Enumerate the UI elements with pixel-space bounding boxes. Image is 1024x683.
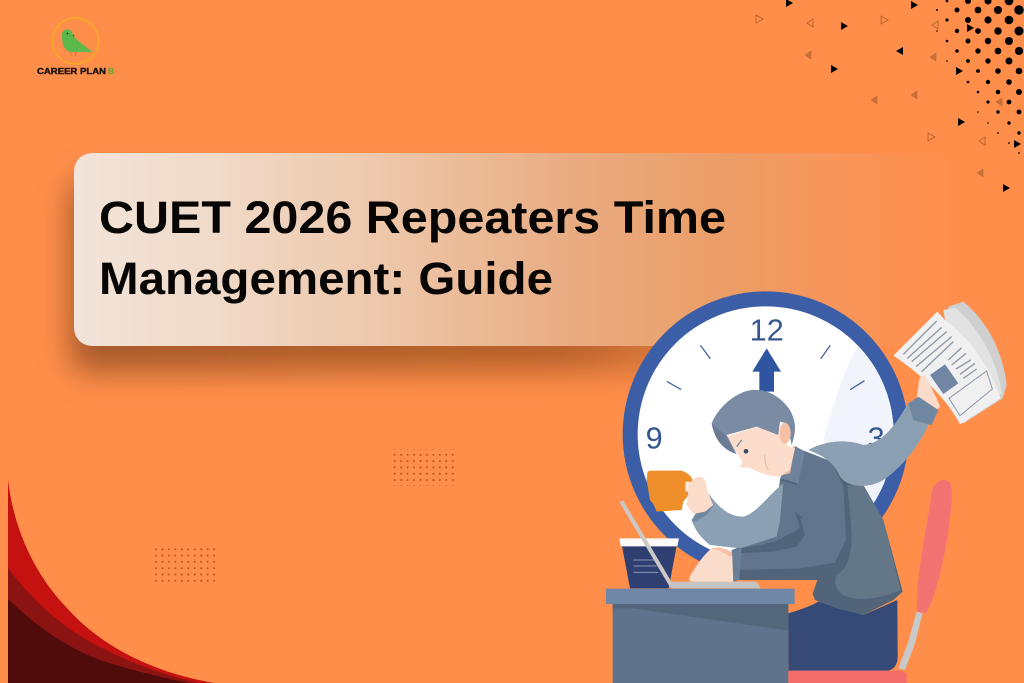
hand on laptop bbox=[689, 548, 742, 582]
corner curves bottom left bbox=[8, 480, 214, 683]
torso bbox=[732, 446, 903, 615]
logo: Career Plan B: CAREER PLAN bbox=[37, 66, 106, 76]
logo: Career Plan B: B bbox=[108, 66, 114, 76]
title bbox=[99, 192, 726, 304]
title panel bbox=[74, 153, 960, 346]
legs bbox=[788, 600, 898, 671]
logo: Career Plan B bbox=[37, 18, 114, 76]
chair bbox=[788, 480, 952, 683]
head bbox=[712, 390, 795, 477]
title: Management: Guide bbox=[99, 253, 553, 304]
decorative triangles top right bbox=[756, 0, 1021, 192]
shadow of the title panel bbox=[70, 180, 770, 372]
coffee cup and holding hand bbox=[647, 471, 713, 514]
laptop bbox=[621, 501, 761, 588]
raised arm bbox=[808, 403, 930, 486]
clock: 3 bbox=[868, 421, 885, 455]
clock: 12 bbox=[750, 314, 784, 348]
clock bbox=[623, 291, 909, 577]
notebook behind laptop bbox=[619, 538, 679, 588]
illustration: busy man with clock bbox=[606, 291, 1007, 683]
desk bbox=[606, 589, 795, 683]
raised hand and cuff bbox=[908, 375, 940, 425]
clock: 9 bbox=[646, 421, 663, 455]
left arm bbox=[692, 483, 783, 548]
dot grid centre bbox=[392, 449, 455, 486]
decorative halftone dots top right bbox=[936, 0, 1024, 154]
title: CUET 2026 Repeaters Time bbox=[99, 192, 726, 243]
newspaper bbox=[893, 302, 1007, 424]
dot grid lower left bbox=[154, 546, 217, 583]
